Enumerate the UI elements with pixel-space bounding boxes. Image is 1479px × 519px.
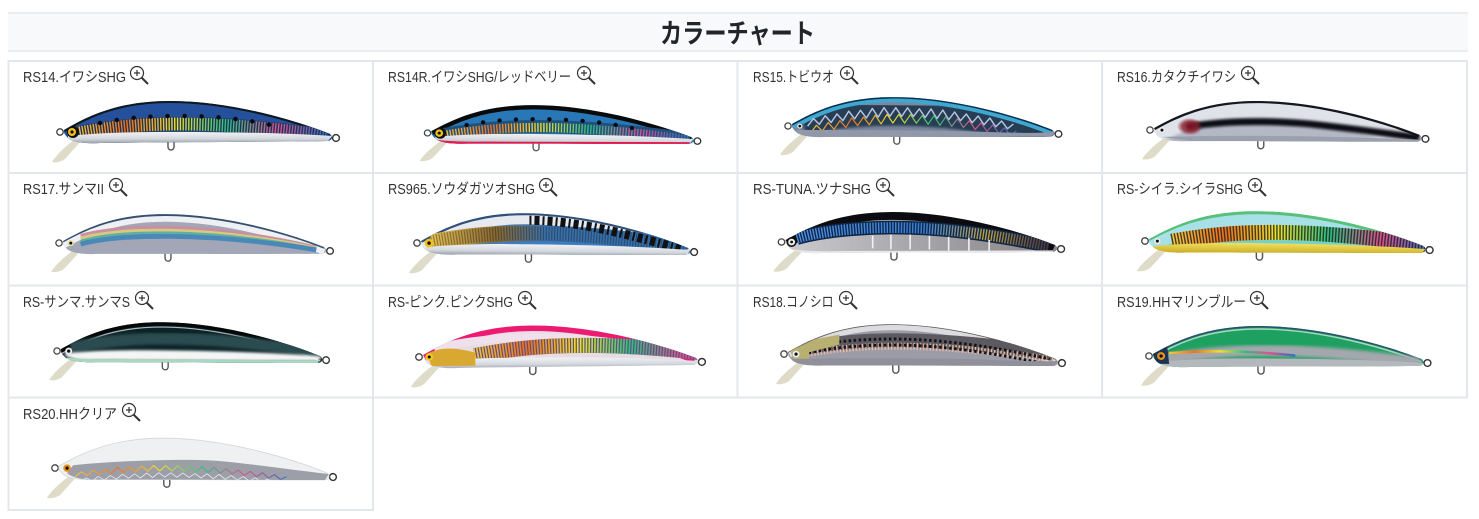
lure: RS14 <box>52 101 339 162</box>
lure: RS18 <box>776 323 1065 387</box>
panel: RS-サンマ <box>8 286 330 396</box>
panel: RS14R: RS14R.イワシSHG/レッドベリー <box>388 70 571 86</box>
lure: RS15 <box>780 96 1062 157</box>
panel: RS-シイラ: RS-シイラ.シイラSHG <box>1117 182 1243 198</box>
heading band <box>8 13 1468 51</box>
lure: RS19 <box>1141 326 1431 387</box>
lure: RS17 <box>51 213 333 274</box>
panel: RS-サンマ: RS-サンマ.サンマS <box>23 295 130 311</box>
panel: RS14 <box>8 61 373 173</box>
panel: RS15: RS15.トビウオ <box>753 69 834 86</box>
panel: RS965: RS965.ソウダガツオSHG <box>388 181 535 198</box>
lure: RS16 <box>1142 100 1429 163</box>
panel: RS14R <box>373 61 738 173</box>
lure: RS14R <box>420 104 701 164</box>
panel: RS-シイラ <box>1102 173 1467 286</box>
panel: RS17: RS17.サンマII <box>23 182 104 198</box>
panel: RS19: RS19.HHマリンブルー <box>1117 293 1246 311</box>
panel: RS20 <box>8 398 373 510</box>
panel: RS15 <box>738 60 1101 156</box>
panel: RS16: RS16.カタクチイワシ <box>1117 69 1236 86</box>
panel: RS-TUNA: RS-TUNA.ツナSHG <box>753 182 871 198</box>
lure: RS-サンマ <box>49 321 329 384</box>
panel: RS17 <box>8 174 334 284</box>
panel: RS-TUNA <box>754 178 1066 272</box>
panel: RS19 <box>1102 286 1467 398</box>
panel: RS-ピンク <box>373 286 738 398</box>
lure: RS-ピンク <box>411 325 735 387</box>
panel: RS16 <box>1102 61 1467 173</box>
panel: RS-ピンク: RS-ピンク.ピンクSHG <box>388 294 513 311</box>
lure: RS965 <box>409 212 698 276</box>
lure: RS-シイラ <box>1137 210 1434 274</box>
panel: RS965 <box>389 178 698 274</box>
panel: RS18: RS18.コノシロ <box>753 295 834 311</box>
panel: RS18 <box>738 286 1102 398</box>
panel: RS20: RS20.HHクリア <box>23 406 117 423</box>
lure: RS20 <box>47 437 336 501</box>
panel: RS14: RS14.イワシSHG <box>23 70 126 86</box>
lure: RS-TUNA <box>773 212 1065 273</box>
title: カラーチャート <box>660 19 815 49</box>
